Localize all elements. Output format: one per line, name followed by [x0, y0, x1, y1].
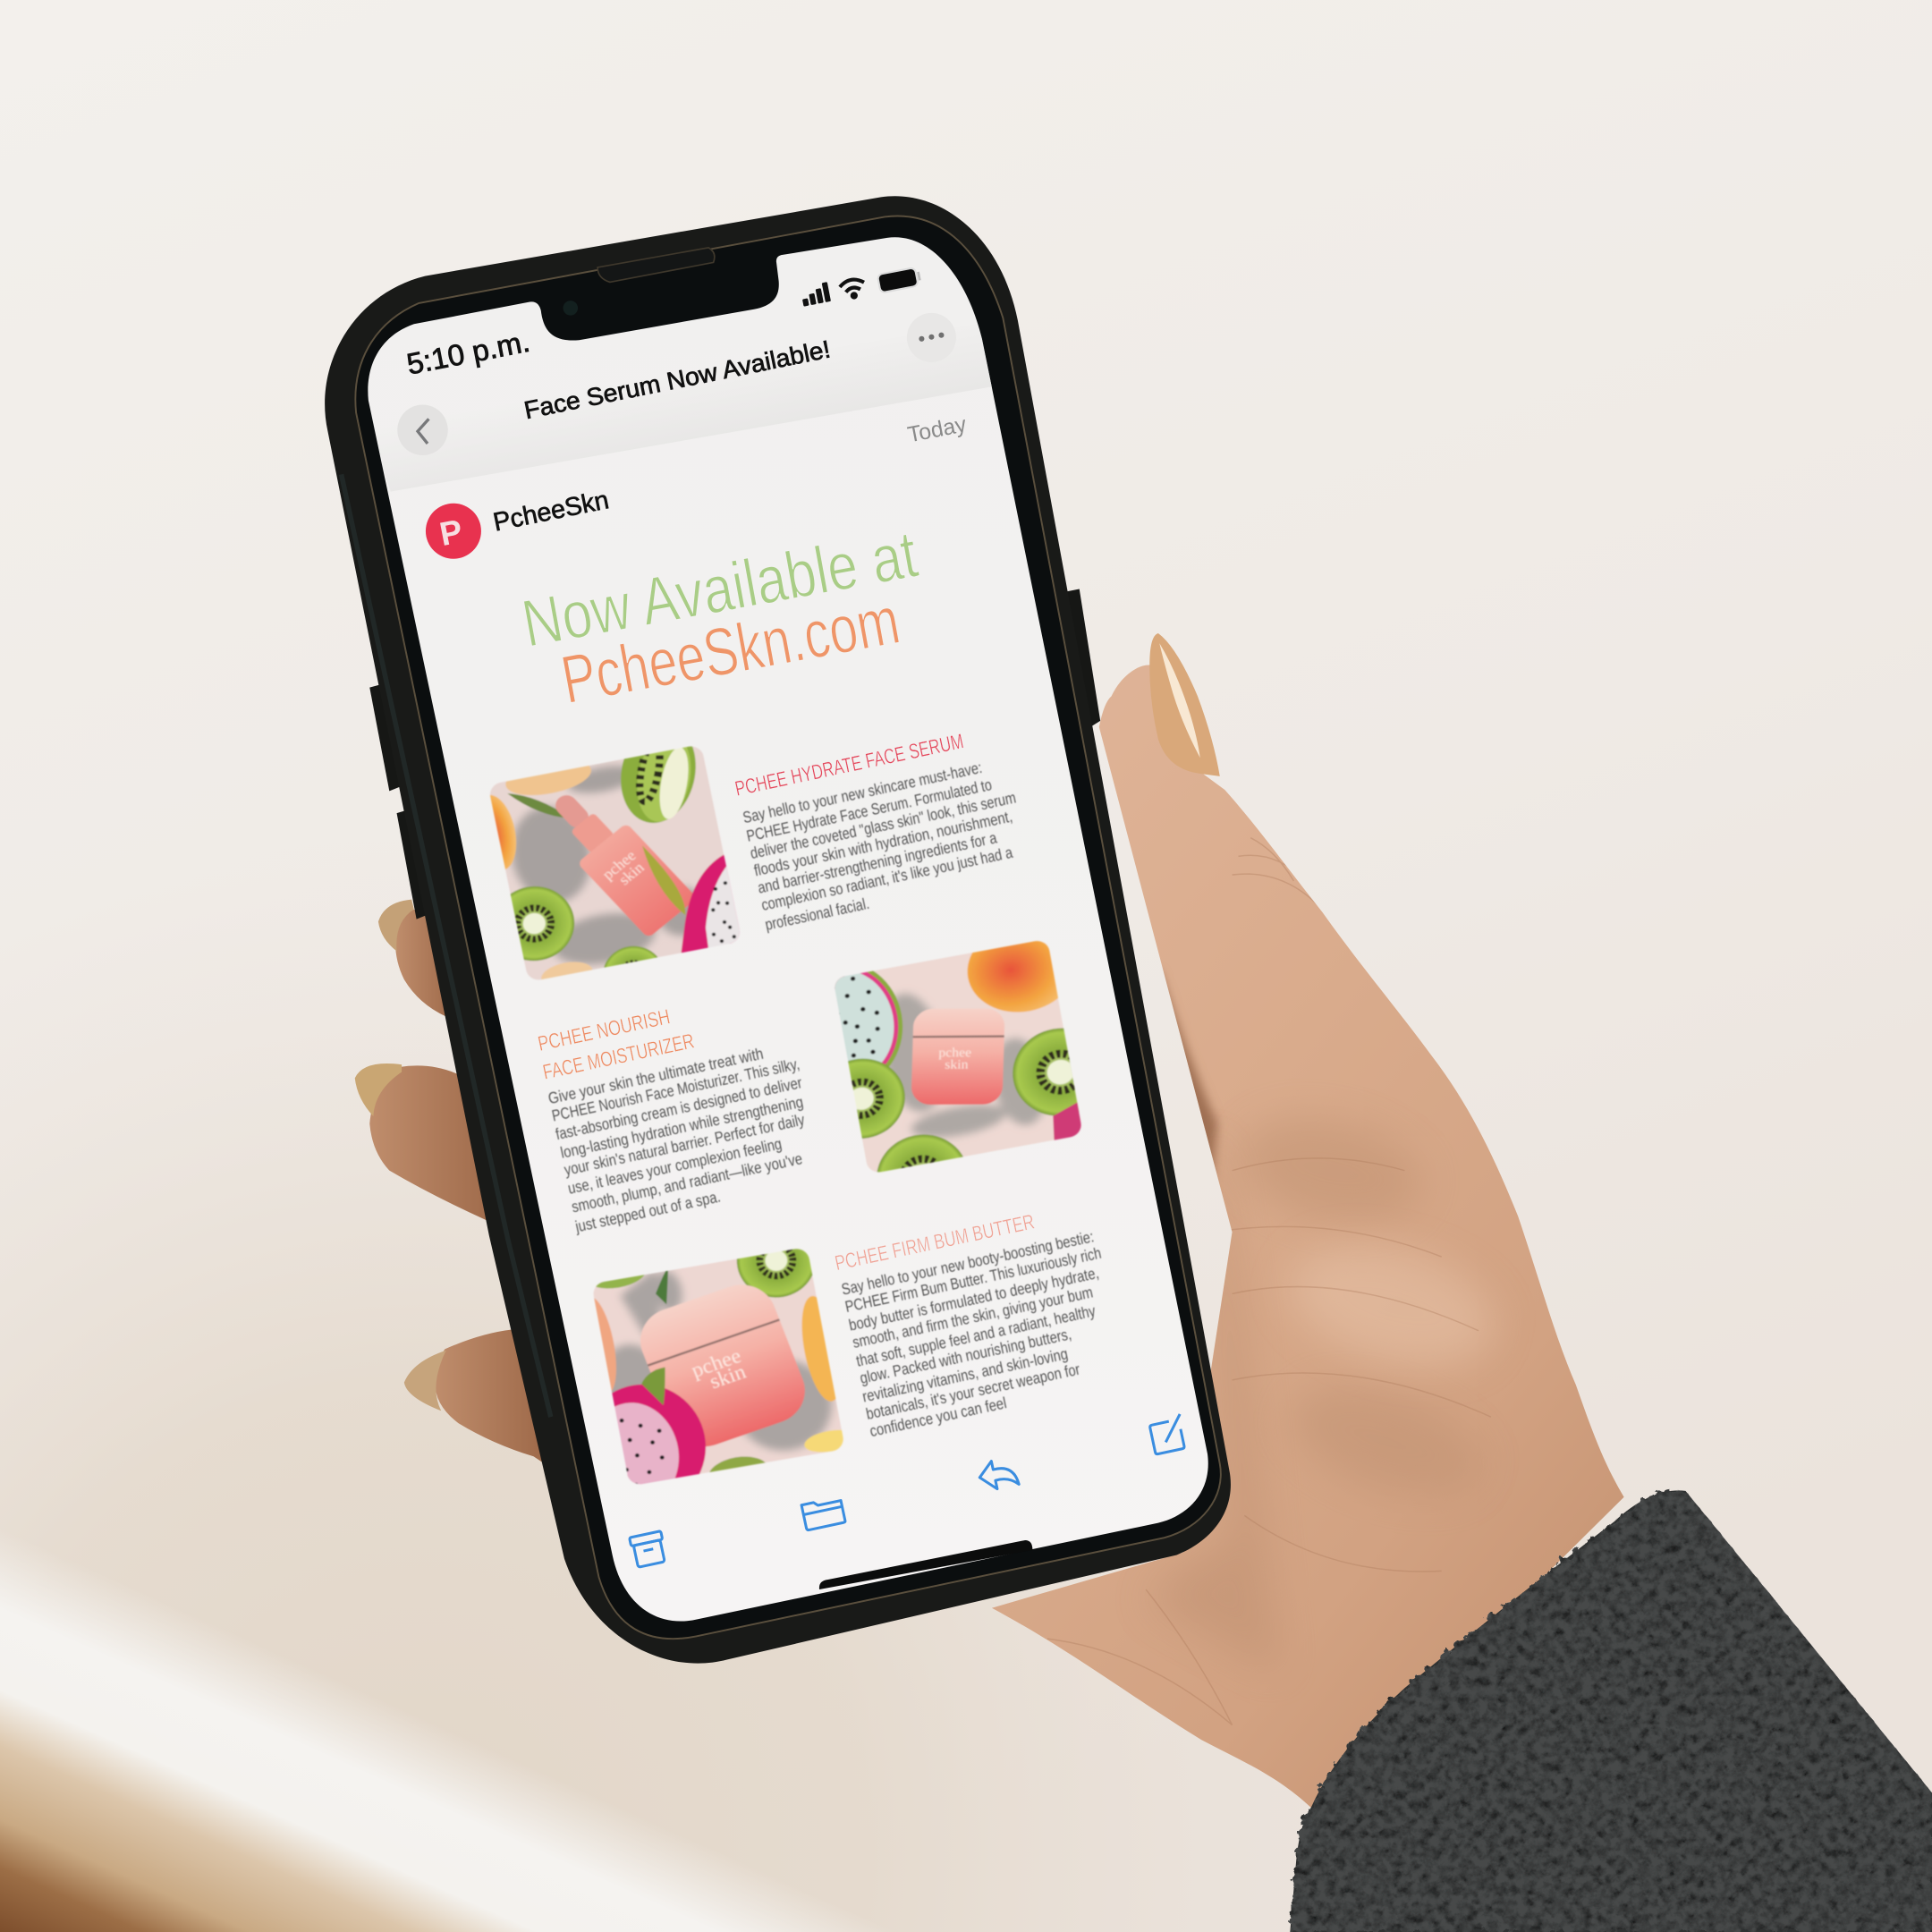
- toolbar: archive icon: [630, 1531, 667, 1568]
- moisturizer description: fast-absorbing cream is designed to deliver: [554, 1073, 803, 1143]
- serum description: PCHEE Hydrate Face Serum. Formulated to: [745, 775, 994, 845]
- moisturizer description: PCHEE Nourish Face Moisturizer. This silky,: [550, 1055, 801, 1124]
- product image: moisturizer: pchee: [938, 1046, 972, 1060]
- product text: body butter: [833, 1209, 1103, 1440]
- body butter description: that soft, supple feel and a radiant, healthy: [854, 1301, 1097, 1370]
- camera: [564, 301, 578, 316]
- body butter description: PCHEE Firm Bum Butter. This luxuriously rich: [843, 1244, 1103, 1316]
- serum title: PCHEE HYDRATE FACE SERUM: [733, 729, 965, 801]
- back button: [397, 405, 448, 455]
- serum description: floods your skin with hydration, nourishment,: [752, 807, 1014, 879]
- toolbar: compose icon: [1148, 1414, 1187, 1454]
- bottom sensor bar: [819, 1540, 1032, 1589]
- crease shadow by phone: [1163, 970, 1222, 1176]
- phone: [325, 196, 1231, 1664]
- product image: serum: skin: [614, 859, 648, 888]
- speaker: [597, 248, 715, 282]
- body butter description: body butter is formulated to deeply hydrate,: [847, 1264, 1100, 1335]
- body butter description: botanicals, it's your secret weapon for: [864, 1360, 1081, 1423]
- serum description: deliver the coveted "glass skin" look, this serum: [749, 788, 1018, 862]
- headline: PcheeSkn.com: [555, 582, 905, 718]
- status bar time: 5:10 p.m.: [404, 326, 532, 382]
- finger: ring: [404, 1329, 552, 1469]
- product image: serum: [489, 746, 741, 980]
- body butter description: [840, 1227, 1103, 1440]
- side buttons: [369, 589, 1100, 919]
- toolbar: folder icon: [801, 1497, 845, 1530]
- product text: moisturizer: [536, 1004, 806, 1236]
- product image: body butter: [593, 1248, 844, 1485]
- palm shading: [1172, 1252, 1261, 1642]
- product text: serum: [733, 729, 1018, 934]
- case reflection: [342, 474, 551, 1417]
- date: Today: [906, 412, 969, 447]
- moisturizer description: just stepped out of a spa.: [573, 1188, 722, 1236]
- hand behind phone: [355, 633, 1624, 1808]
- headline: Now Available at: [517, 516, 923, 661]
- moisturizer description: smooth, plump, and radiant—like you've: [570, 1149, 804, 1216]
- body butter description: glow. Packed with nourishing butters,: [859, 1325, 1073, 1387]
- body butter description: revitalizing vitamins, and skin-loving: [860, 1344, 1070, 1406]
- moisturizer description: long-lasting hydration while strengthening: [559, 1093, 805, 1162]
- body butter description: Say hello to your new booty-boosting bestie:: [840, 1227, 1096, 1299]
- hand shading: [1047, 838, 1508, 1725]
- serum description: Say hello to your new skincare must-have:: [741, 758, 984, 826]
- moisturizer description: your skin's natural barrier. Perfect for daily: [563, 1111, 806, 1179]
- body butter title: PCHEE FIRM BUM BUTTER: [833, 1209, 1037, 1275]
- finger: index: [378, 900, 458, 1022]
- more button: [907, 313, 956, 362]
- knuckle shadow: [1252, 1125, 1406, 1213]
- serum description: complexion so radiant, it's like you just had a: [759, 843, 1014, 914]
- product image: body butter: skin: [707, 1360, 750, 1394]
- body butter description: smooth, and firm the skin, giving your bum: [851, 1283, 1095, 1352]
- moisturizer title: [536, 1004, 696, 1084]
- serum description: professional facial.: [764, 894, 871, 934]
- moisturizer title: FACE MOISTURIZER: [541, 1029, 696, 1084]
- moisturizer description: use, it leaves your complexion feeling: [566, 1135, 784, 1198]
- case: [325, 196, 1231, 1664]
- palm and thumb: [992, 633, 1624, 1808]
- header shade: [369, 320, 998, 492]
- status icon: signal: [800, 282, 831, 307]
- wrist shadow: [1311, 1402, 1454, 1479]
- moisturizer title: PCHEE NOURISH: [536, 1004, 672, 1055]
- sender avatar: [426, 504, 481, 559]
- serum description: [741, 758, 1018, 934]
- sender name: PcheeSkn: [491, 486, 611, 538]
- screen: [368, 237, 1208, 1622]
- toolbar: reply icon: [977, 1456, 1019, 1492]
- knuckle wrinkles: [1047, 838, 1491, 1725]
- status icon: wifi: [839, 277, 867, 300]
- product image: serum: pchee: [598, 847, 640, 883]
- thumb nail: [1149, 633, 1220, 776]
- email subject: Face Serum Now Available!: [521, 335, 833, 424]
- sweater sleeve: [1290, 1490, 1932, 1932]
- sender avatar: P: [436, 512, 465, 553]
- moisturizer description: [547, 1045, 806, 1236]
- product image: moisturizer: skin: [945, 1057, 969, 1072]
- status icon: battery: [877, 267, 922, 292]
- blurred foreground object: [0, 1528, 973, 1932]
- bezel with gold rim: [355, 216, 1221, 1639]
- serum description: and barrier-strengthening ingredients for a: [756, 828, 998, 897]
- finger: middle: [355, 1063, 508, 1233]
- product image: moisturizer: [834, 940, 1082, 1174]
- body butter description: confidence you can feel: [869, 1394, 1008, 1440]
- product image: body butter: pchee: [689, 1344, 744, 1383]
- thumb highlight: [1294, 1243, 1493, 1369]
- moisturizer description: Give your skin the ultimate treat with: [547, 1045, 765, 1107]
- headline: [517, 516, 923, 718]
